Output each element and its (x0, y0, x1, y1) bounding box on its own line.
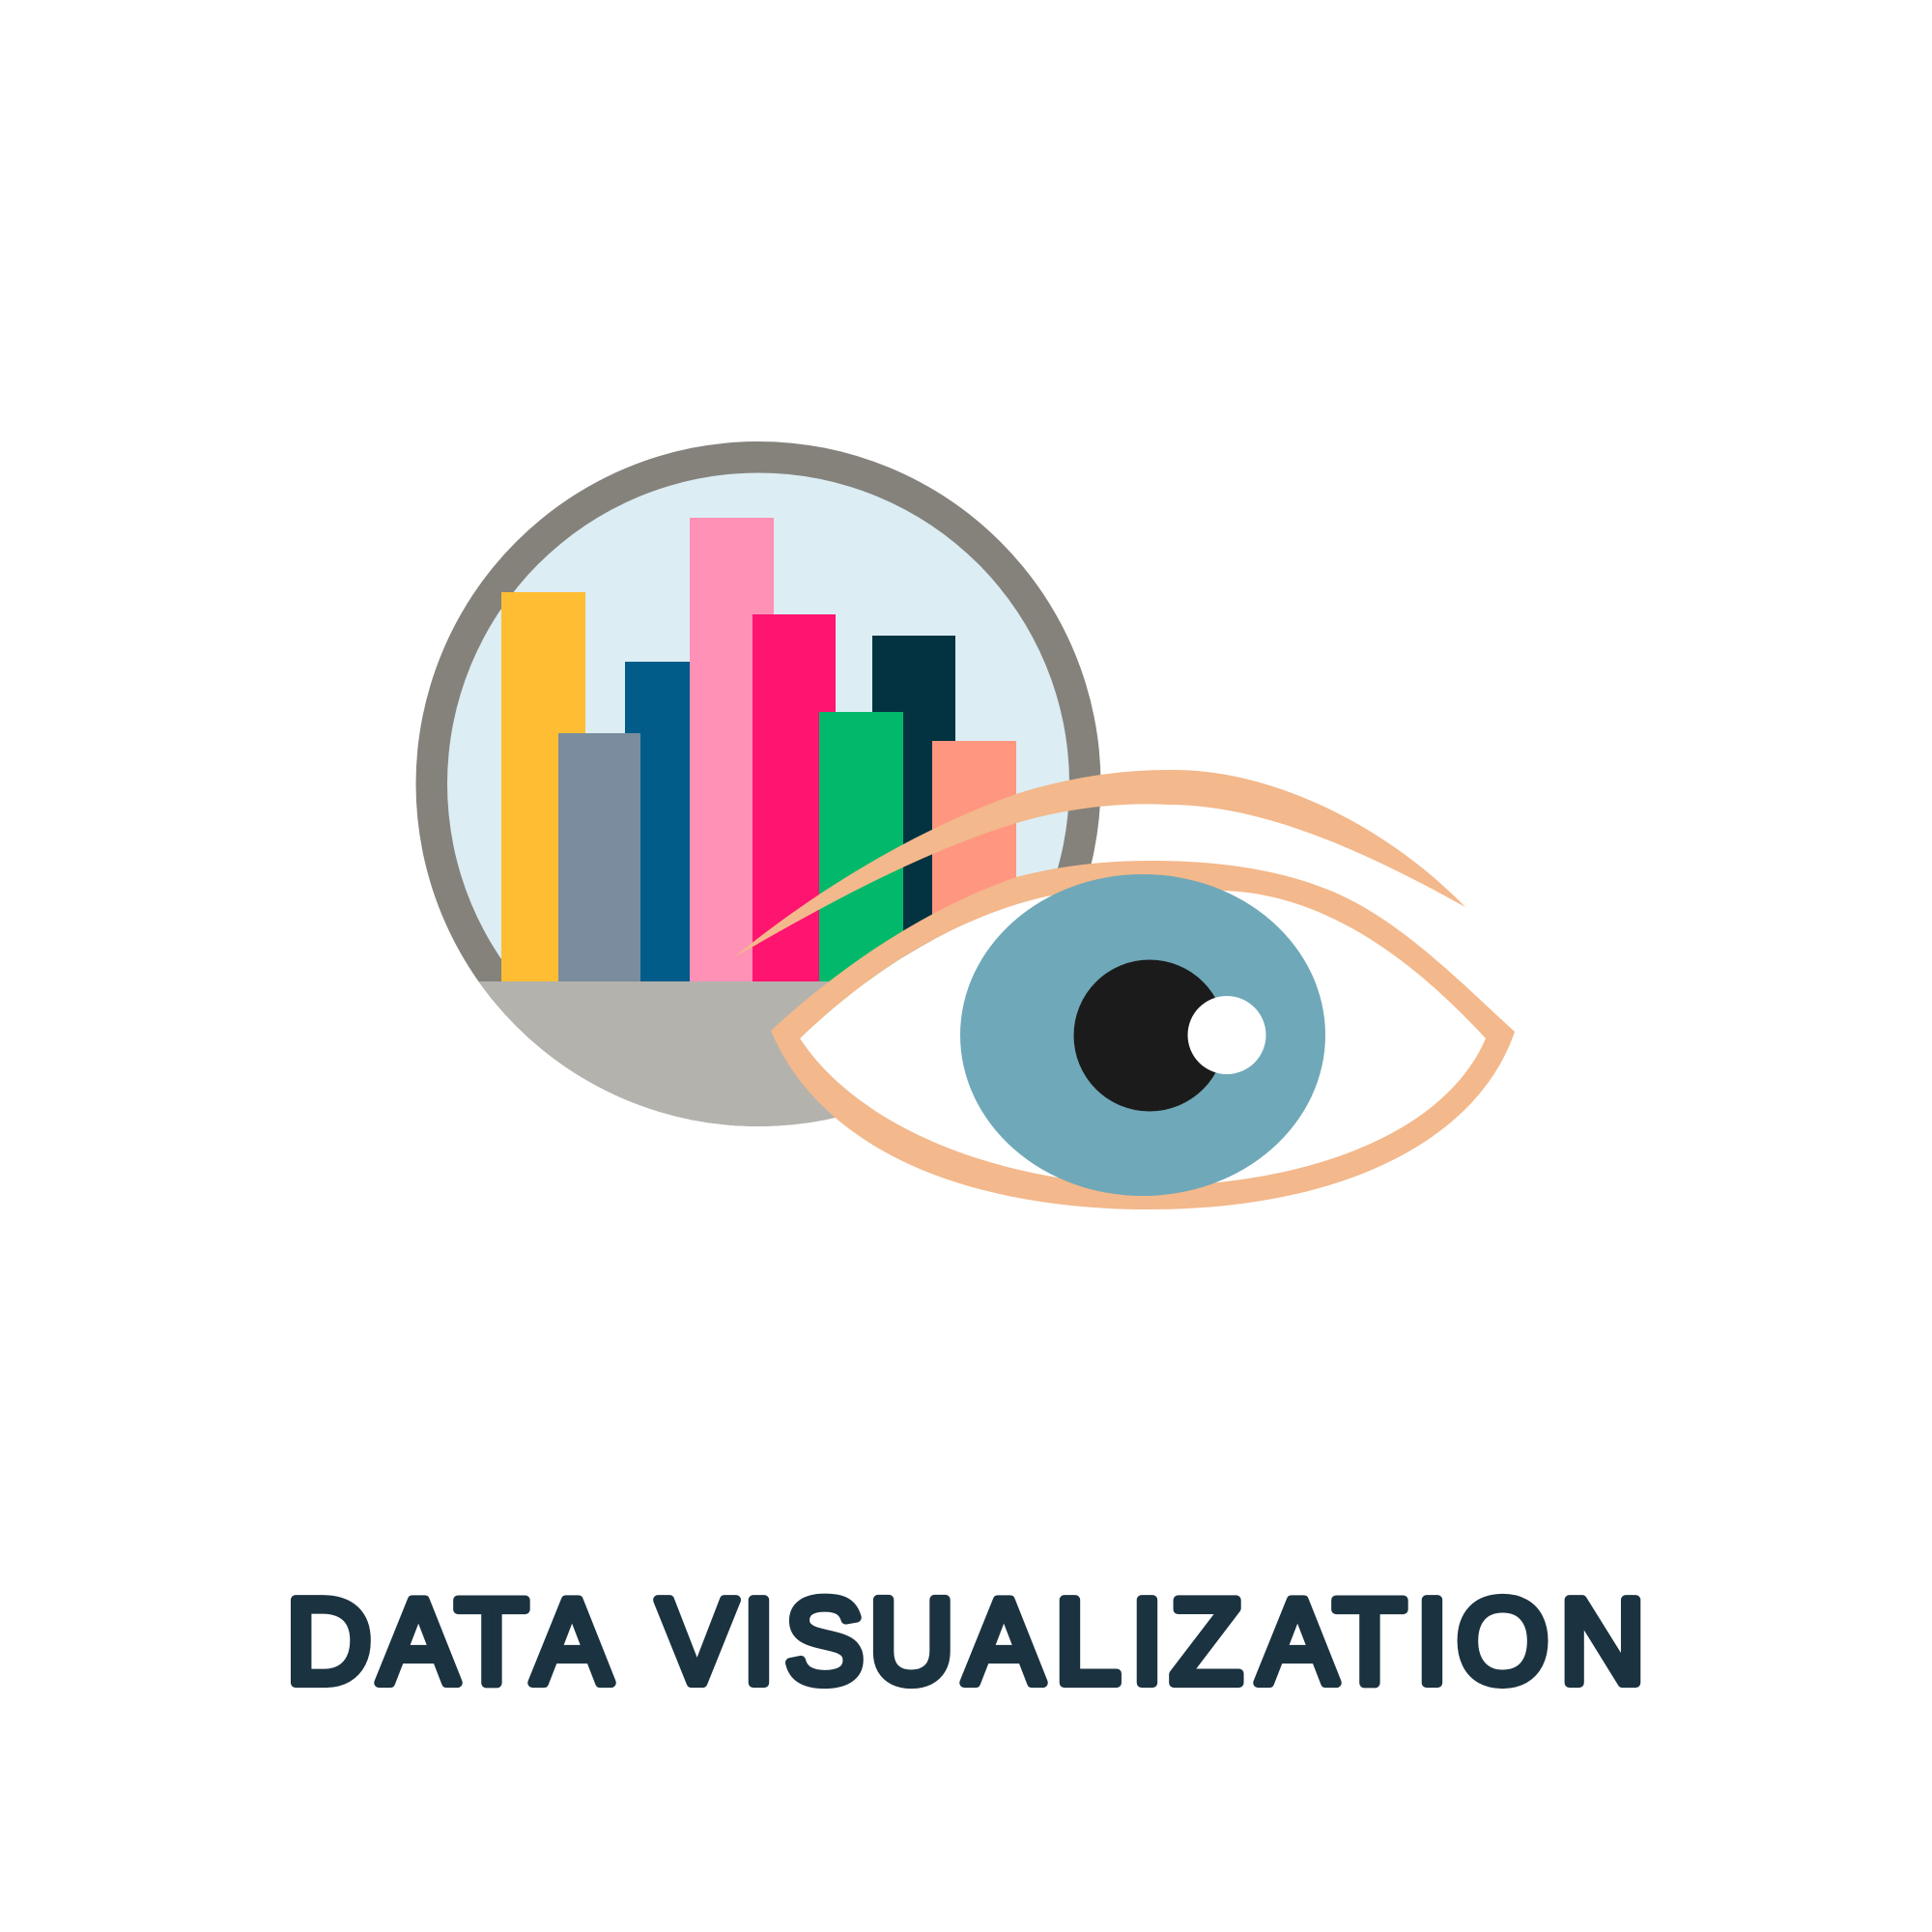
eye white (800, 887, 1486, 1186)
eye highlight (1188, 996, 1265, 1074)
eyebrow (734, 770, 1465, 957)
eye outline (771, 861, 1515, 1209)
pupil (1074, 960, 1225, 1111)
icon: magnifier circle with sky and ground (415, 441, 1101, 1126)
bar chart (501, 518, 1016, 981)
iris (960, 874, 1325, 1196)
title: DATA VISUALIZATION (286, 1575, 1645, 1709)
infographic canvas (290, 441, 1640, 1689)
icon: eye (734, 770, 1515, 1209)
